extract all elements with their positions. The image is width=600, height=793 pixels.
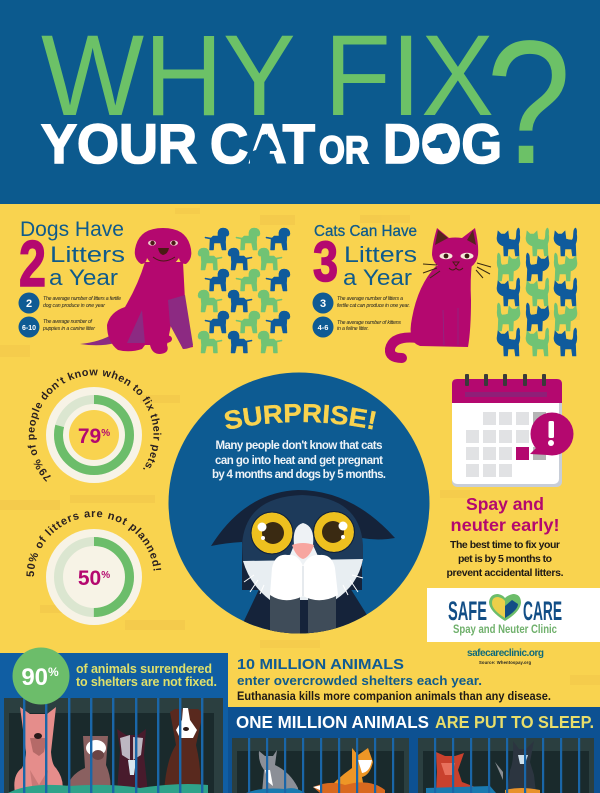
panel: cats	[312, 223, 577, 358]
badge: 90 percent	[12, 648, 70, 704]
header panel	[0, 0, 600, 204]
icon: calendar	[452, 374, 574, 487]
illustration: terrier	[14, 707, 63, 793]
badge: 90 percent: %	[48, 665, 59, 679]
title: why fix: WHY FIX	[41, 12, 494, 140]
website url: safecareclinic.org	[467, 648, 544, 659]
illustration: gray cat	[259, 750, 298, 793]
icon grid: 24 puppies	[198, 228, 290, 353]
logo: safe care clinic	[427, 588, 600, 642]
title: your cat or dog: DOG	[383, 112, 502, 175]
surprise body text	[212, 440, 386, 481]
stat: 3 litters: 3	[320, 298, 326, 310]
icon: cat silhouette in A	[250, 134, 277, 165]
text: 90 percent statement	[76, 662, 217, 689]
logo: safe care clinic: SAFE	[448, 596, 487, 626]
icon grid: 15 kittens	[497, 228, 577, 356]
illustration: red cat	[436, 752, 491, 793]
heading: dogs have 2 litters a year: Dogs Have	[20, 218, 124, 241]
icon: heart logo	[489, 594, 521, 621]
title: your cat or dog: YOUR	[41, 112, 197, 175]
donut chart: 50 percent: %	[101, 570, 110, 581]
heading: cats can have 3 litters a year: Litters	[344, 242, 417, 267]
title: your cat or dog: CAT	[210, 112, 315, 175]
illustration: pit bull	[66, 736, 110, 793]
stat: 4-6 kittens: 4-6	[318, 323, 328, 332]
title: question mark: ?	[486, 4, 571, 200]
donut chart: 79 percent	[46, 387, 142, 483]
panel: surprise circle	[168, 372, 430, 634]
text: 10 million animals: 10 MILLION ANIMALS	[237, 656, 404, 673]
heading: dogs have 2 litters a year	[19, 218, 125, 300]
illustration: husky	[117, 729, 148, 793]
text: 90 percent statement: to shelters are not fixed.	[76, 675, 217, 689]
stat: 4-6 kittens: The average number of kittens	[337, 320, 401, 326]
stat: 3 litters	[312, 292, 410, 314]
heading: spay and neuter early: Spay and	[466, 494, 544, 514]
heading: surprise: SURPRISE!	[224, 404, 376, 430]
heading: cats can have 3 litters a year: a Year	[343, 265, 412, 290]
heading: cats can have 3 litters a year	[313, 223, 417, 294]
text: 10 million animals: enter overcrowded shelters each year.	[237, 673, 482, 688]
spay text block	[446, 539, 564, 579]
stat: 3 litters: The average number of litters a	[337, 296, 403, 302]
surprise body text: can go into heat and get pregnant	[215, 455, 383, 467]
illustration: dark cat	[495, 741, 536, 793]
cage: cat and fox	[232, 738, 409, 793]
heading: spay and neuter early	[450, 494, 560, 535]
stat: 3 litters: fertile cat can produce in one year.	[337, 303, 410, 309]
stat: 2 litters	[18, 292, 121, 314]
curved label: 50 percent: 50% of litters are not planned!	[26, 511, 162, 577]
text: 10 million animals	[237, 656, 551, 703]
surprise body text: Many people don't know that cats	[216, 440, 382, 452]
stat: 2 litters: The average number of litters a fertile	[43, 296, 121, 302]
title: your cat or dog	[41, 112, 502, 175]
stat: 6-10 puppies: 6-10	[22, 325, 36, 332]
badge: 90 percent: 90	[21, 664, 48, 691]
stat: 2 litters: 2	[26, 298, 32, 310]
heading: dogs have 2 litters a year: Litters	[50, 242, 125, 267]
illustration: orange fox	[313, 748, 385, 793]
stat: 4-6 kittens	[312, 316, 401, 338]
cage: red cat and dark cat	[418, 738, 594, 793]
logo: safe care clinic: CARE	[523, 596, 562, 626]
stat: 2 litters: dog can produce in one year	[43, 303, 105, 309]
source note: Source: Whentospay.org	[479, 660, 531, 665]
stat: 4-6 kittens: in a feline litter.	[337, 326, 369, 332]
heading: dogs have 2 litters a year: a Year	[49, 265, 118, 290]
surprise body text: by 4 months and dogs by 5 months.	[212, 469, 386, 481]
blanket	[8, 784, 208, 793]
panel: dogs	[18, 218, 290, 354]
panel: 90 percent shelter	[0, 648, 228, 793]
stat: 6-10 puppies: puppies in a canine litter	[42, 326, 95, 332]
donut chart: 79 percent: 79	[78, 425, 101, 448]
donut chart: 50 percent: 50	[78, 567, 101, 590]
icon: dog silhouette in O	[427, 130, 455, 158]
spay text block: The best time to fix your	[450, 539, 560, 551]
curved label: 79 percent: 79% of people don't know when to fix their pets.	[28, 370, 162, 482]
text: 90 percent statement: of animals surrendered	[76, 662, 212, 676]
donut chart: 50 percent	[46, 529, 142, 625]
icon: big dog	[80, 228, 193, 354]
donut chart: 79 percent: %	[101, 428, 110, 439]
heading: cats can have 3 litters a year: Cats Can Have	[314, 223, 417, 240]
heading: one million put to sleep	[236, 712, 594, 732]
title: your cat or dog: OR	[319, 129, 369, 172]
cage: four dogs	[4, 698, 223, 793]
illustration: pleading cat	[211, 490, 395, 640]
logo: safe care clinic: Spay and Neuter Clinic	[453, 622, 557, 636]
heading: one million put to sleep: ONE MILLION ANIMALS	[236, 712, 429, 732]
heading: dogs have 2 litters a year: 2	[19, 227, 46, 300]
illustration: boxer	[164, 708, 203, 793]
heading: spay and neuter early: neuter early!	[450, 515, 560, 535]
spay text block: pet is by 5 months to	[458, 553, 552, 565]
stat: 6-10 puppies: The average number of	[43, 319, 93, 325]
icon: alert bubble	[530, 412, 574, 456]
icon: big cat	[390, 228, 491, 358]
heading: cats can have 3 litters a year: 3	[313, 230, 338, 294]
panel: one million animals	[228, 707, 600, 793]
stat: 6-10 puppies	[18, 316, 95, 338]
text: 10 million animals: Euthanasia kills more companion animals than any disease.	[237, 691, 551, 703]
spay text block: prevent accidental litters.	[446, 567, 564, 579]
